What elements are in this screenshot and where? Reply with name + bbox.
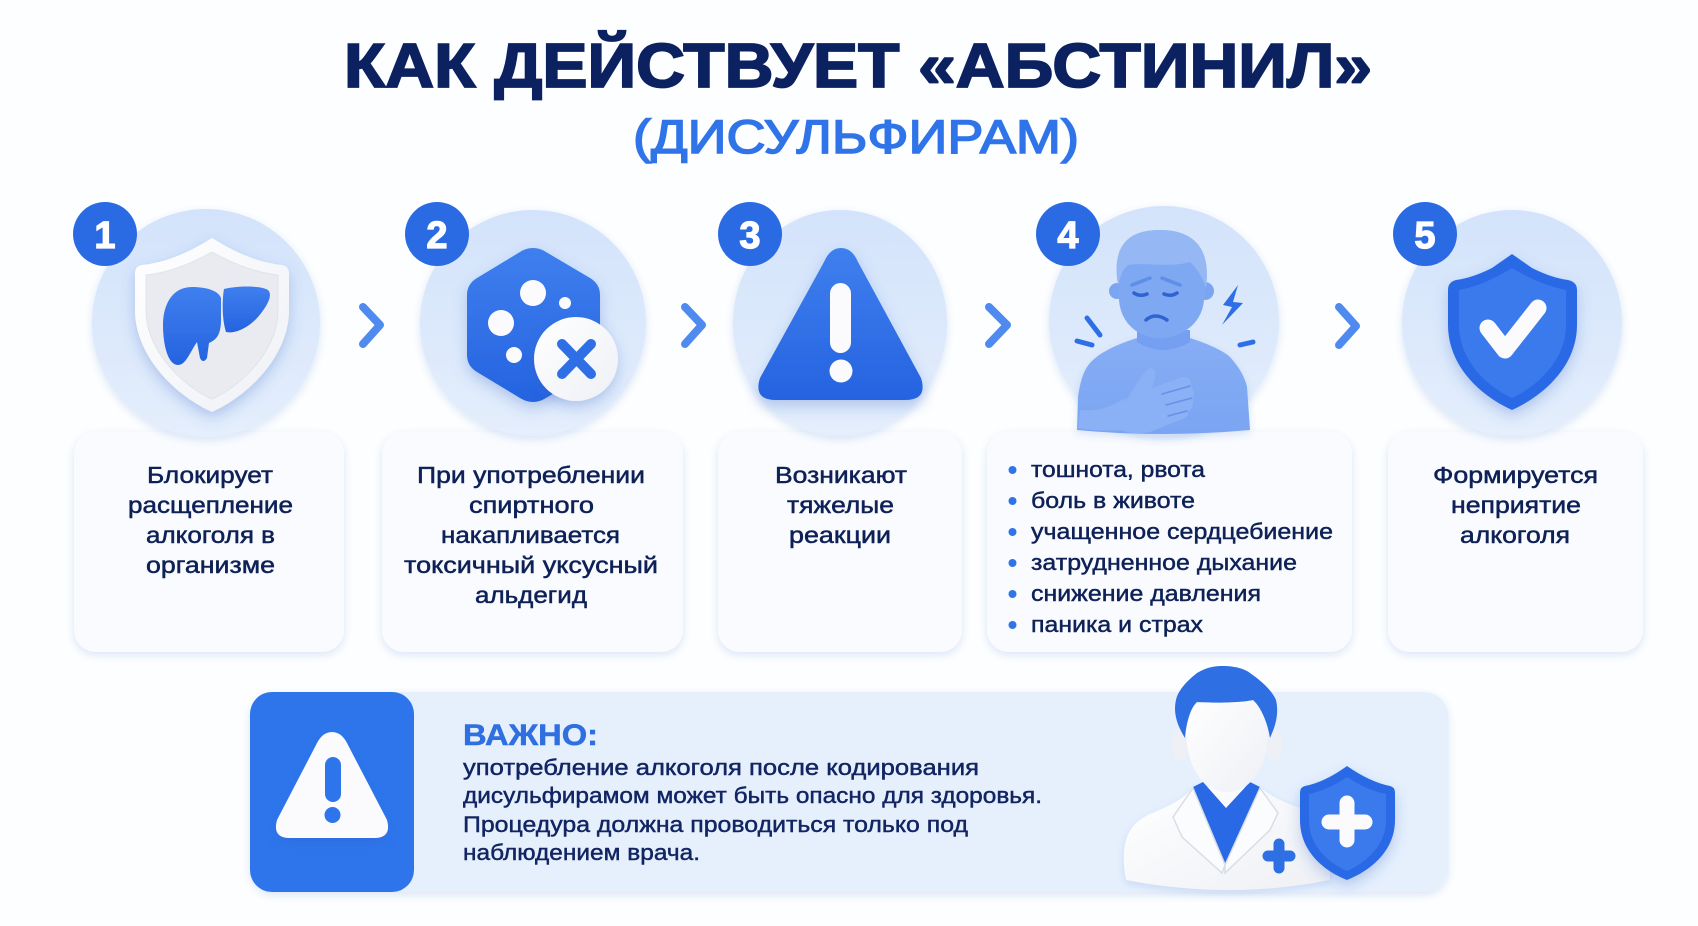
card 2 text	[404, 462, 658, 608]
symptom list: тошнота, рвота	[1031, 457, 1206, 482]
pain marks	[1077, 285, 1253, 345]
card 3	[718, 432, 962, 652]
title: КАК ДЕЙСТВУЕТ «АБСТИНИЛ»	[344, 31, 1372, 101]
banner heading: ВАЖНО:	[463, 719, 598, 752]
card 1 text: организме	[146, 552, 275, 578]
list bullets	[1008, 466, 1016, 629]
card 2 text: спиртного	[469, 492, 594, 518]
forearm	[1078, 398, 1135, 431]
step 2 disc	[420, 210, 646, 436]
step 3 disc	[733, 210, 947, 436]
face	[1134, 293, 1177, 320]
warning banner	[250, 666, 1448, 892]
arrow 3	[989, 307, 1007, 344]
ears	[1172, 729, 1188, 761]
icon: banner warning triangle	[276, 732, 388, 838]
number badge 5	[1393, 202, 1457, 266]
icon: warning triangle	[758, 248, 923, 400]
card 5 text: Формируется	[1433, 462, 1598, 488]
step 5 disc	[1402, 210, 1622, 436]
card 5 text: неприятие	[1451, 492, 1581, 518]
neck	[1137, 330, 1190, 350]
card 4	[987, 432, 1352, 652]
banner text: дисульфирамом может быть опасно для здоровья.	[463, 783, 1042, 808]
card 5 text	[1433, 462, 1598, 548]
symptom list	[1031, 457, 1333, 637]
coat cross	[1268, 844, 1290, 868]
card 5 text: алкоголя	[1460, 522, 1570, 548]
card 1	[74, 432, 344, 652]
card 2 text: При употреблении	[417, 462, 645, 488]
subtitle: (ДИСУЛЬФИРАМ)	[633, 110, 1079, 163]
face	[1186, 697, 1268, 792]
icon: shield with check	[1448, 254, 1577, 410]
card 1 text: расщепление	[128, 492, 293, 518]
banner text: Процедура должна проводиться только под	[463, 812, 968, 837]
x badge	[534, 317, 618, 401]
hand	[1122, 368, 1194, 433]
card 1 text: Блокирует	[147, 462, 274, 488]
number badge 2	[405, 202, 469, 266]
molecule dots	[488, 280, 571, 363]
arrow 1	[363, 307, 380, 344]
symptom list: затрудненное дыхание	[1031, 550, 1297, 575]
icon: liver in white shield	[135, 238, 289, 412]
number badge 2: 2	[426, 215, 448, 257]
card 2 text: альдегид	[475, 582, 588, 608]
card 2 text: накапливается	[441, 522, 620, 548]
shield cross	[1329, 803, 1365, 840]
coat lapels	[1173, 788, 1278, 873]
number badge 4	[1036, 202, 1100, 266]
icon: molecule hexagon with x	[467, 248, 618, 402]
card 2 text: токсичный уксусный	[404, 552, 658, 578]
card 2	[382, 432, 683, 652]
hair	[1116, 230, 1207, 288]
icon: doctor with shield	[1124, 666, 1395, 890]
number badge 1	[73, 202, 137, 266]
symptom list: снижение давления	[1031, 581, 1261, 606]
number badge 3	[718, 202, 782, 266]
symptom list: учащенное сердцебиение	[1031, 519, 1333, 544]
card 3 text	[775, 462, 908, 548]
icon: sick man holding chest	[1077, 230, 1253, 434]
card 3 text: реакции	[789, 522, 891, 548]
banner text: наблюдением врача.	[463, 840, 700, 865]
card 3 text: тяжелые	[787, 492, 894, 518]
finger lines	[1162, 386, 1192, 416]
ears	[1109, 283, 1125, 299]
card 5	[1388, 432, 1643, 652]
arrow 2	[685, 307, 702, 344]
shield	[1300, 766, 1395, 880]
card 1 text	[128, 462, 293, 578]
head	[1118, 230, 1206, 338]
number badge 3: 3	[739, 215, 761, 257]
banner text: употребление алкоголя после кодирования	[463, 755, 979, 780]
shirt	[1193, 782, 1260, 865]
number badge 5: 5	[1414, 215, 1436, 257]
arrow 4	[1339, 307, 1356, 345]
symptom list: паника и страх	[1031, 612, 1203, 637]
number badge 1: 1	[94, 215, 116, 257]
hair	[1175, 666, 1277, 738]
number badge 4: 4	[1057, 215, 1079, 257]
step 1 disc	[92, 209, 320, 437]
symptom list: боль в животе	[1031, 488, 1195, 513]
banner blue tile	[250, 692, 414, 892]
card 1 text: алкоголя в	[146, 522, 275, 548]
card 3 text: Возникают	[775, 462, 908, 488]
banner text	[463, 755, 1042, 865]
step 4 disc	[1049, 206, 1279, 436]
